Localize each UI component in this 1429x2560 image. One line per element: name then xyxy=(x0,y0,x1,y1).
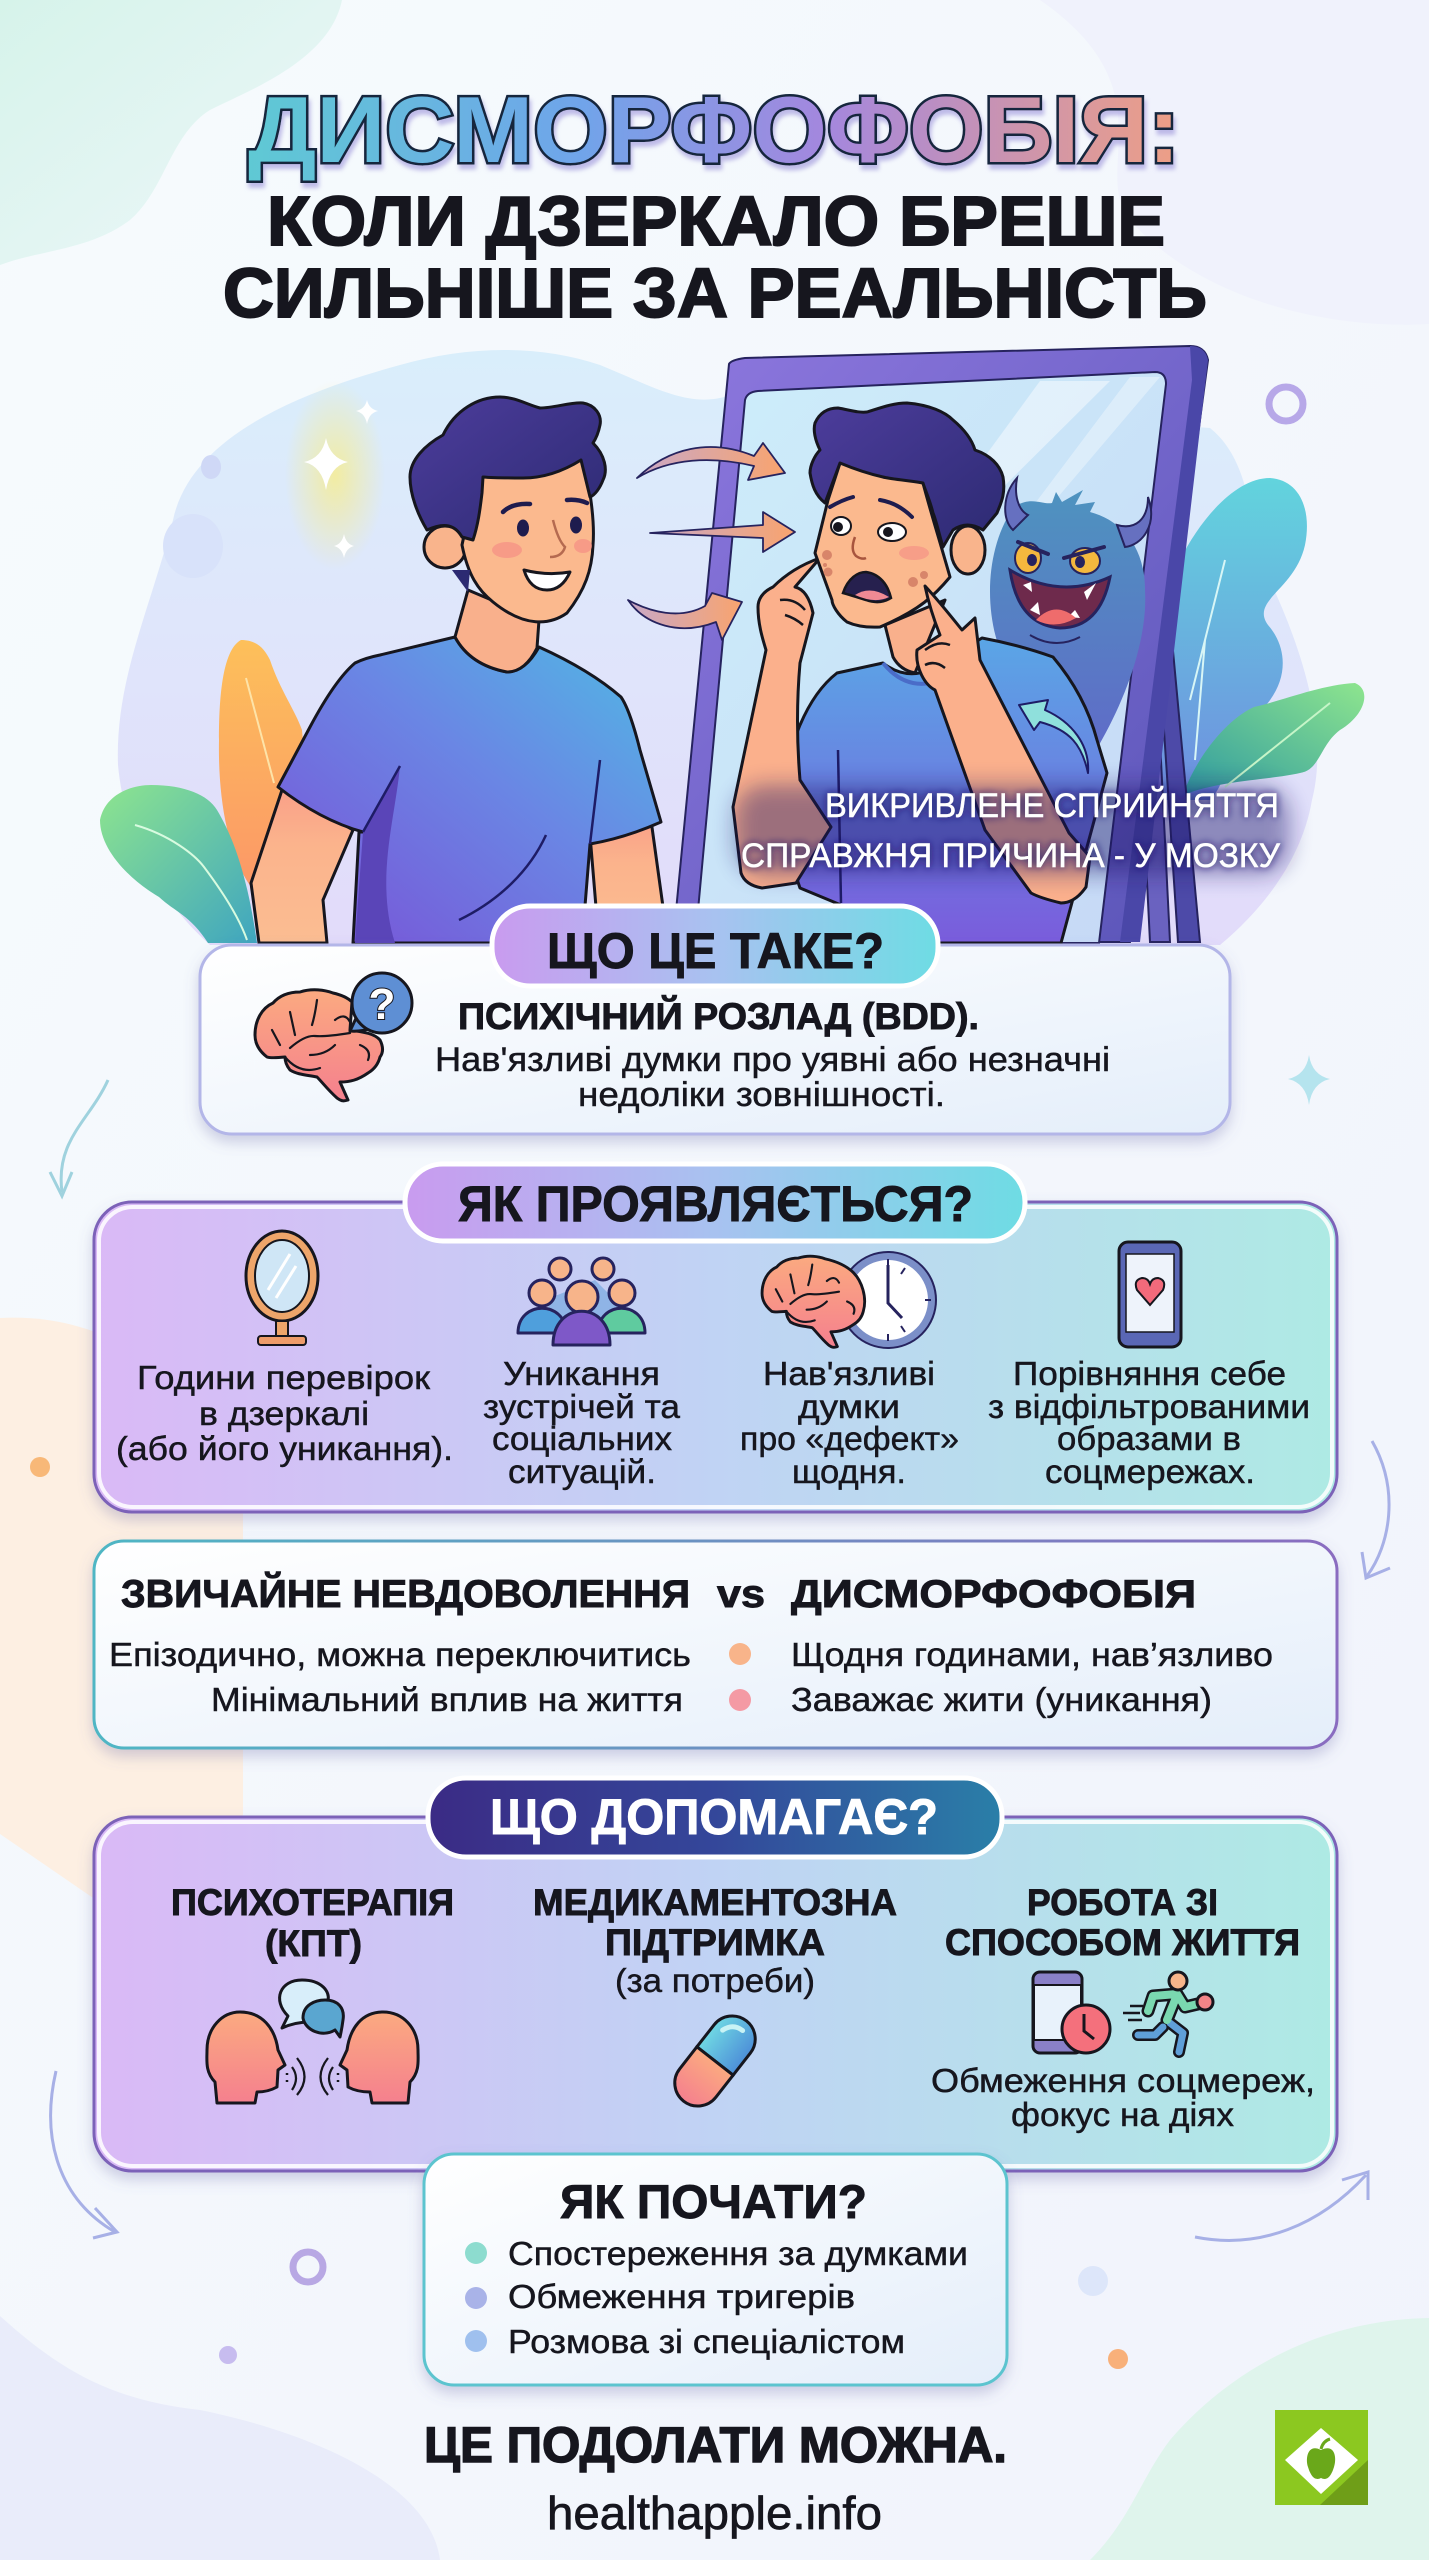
ear and head xyxy=(951,526,985,574)
text: mirror checks: в дзеркалі xyxy=(199,1395,369,1432)
arrows to mirror xyxy=(628,443,795,640)
head xyxy=(424,526,466,568)
text: definition: недоліки зовнішності. xyxy=(578,1076,945,1114)
blue arrow xyxy=(1019,700,1088,773)
heading pill: what helps: ЩО ДОПОМАГАЄ? xyxy=(490,1789,938,1845)
comparison row 1: Епізодично, можна переключитись xyxy=(109,1636,691,1673)
column: psychotherapy: ПСИХОТЕРАПІЯ xyxy=(171,1882,454,1923)
text: comparison: з відфільтрованими xyxy=(988,1388,1310,1425)
comparison row 2 xyxy=(211,1681,1212,1718)
column: lifestyle: Обмеження соцмереж, xyxy=(931,2062,1315,2099)
smiling man xyxy=(251,397,668,943)
icon: brain with question xyxy=(255,973,412,1101)
text: definition: Нав'язливі думки про уявні або незначні xyxy=(435,1041,1110,1079)
icon: runner xyxy=(1123,1972,1213,2052)
title line 3: СИЛЬНІШЕ ЗА РЕАЛЬНІСТЬ xyxy=(223,254,1207,332)
comparison heading xyxy=(121,1571,1196,1616)
panel: symptoms xyxy=(94,1202,1337,1512)
column: psychotherapy xyxy=(171,1882,454,2103)
panel: comparison xyxy=(94,1541,1337,1748)
face details xyxy=(831,517,851,535)
text: definition: ПСИХІЧНИЙ РОЗЛАД (BDD). xyxy=(458,995,979,1037)
hero illustration xyxy=(100,346,1364,945)
panel: how to start xyxy=(424,2154,1007,2385)
heading pill: what helps xyxy=(428,1778,1002,1857)
list item 3: Розмова зі спеціалістом xyxy=(508,2323,905,2360)
text: mirror checks: Години перевірок xyxy=(137,1359,431,1396)
icon: brain with question: ? xyxy=(369,980,395,1029)
icon: phone with heart xyxy=(1119,1242,1181,1347)
website: healthapple.info xyxy=(547,2487,882,2539)
shirt xyxy=(770,638,1107,943)
text: obsessive thoughts: Нав'язливі xyxy=(763,1355,935,1392)
hero backdrop blob xyxy=(118,350,1317,945)
hair xyxy=(810,403,1004,547)
icon: phone and clock xyxy=(1033,1972,1110,2053)
caption: СПРАВЖНЯ ПРИЧИНА - У МОЗКУ xyxy=(741,837,1280,875)
monster xyxy=(990,478,1151,745)
icon: people xyxy=(518,1258,645,1345)
text: avoidance xyxy=(483,1355,681,1490)
neck xyxy=(885,600,945,673)
right hand and arm xyxy=(917,586,1090,903)
decorative arrows and dots xyxy=(30,1055,1390,2369)
text: mirror checks: (або його уникання). xyxy=(116,1430,453,1467)
text: avoidance: зустрічей та xyxy=(483,1388,681,1425)
column: medication xyxy=(533,1882,897,2115)
icon: brain and clock xyxy=(762,1252,936,1348)
comparison heading: vs xyxy=(717,1573,765,1616)
column: lifestyle: фокус на діях xyxy=(1011,2096,1235,2133)
mirror xyxy=(673,346,1208,943)
decorative glow and sparkles xyxy=(163,380,1303,578)
text: avoidance: ситуацій. xyxy=(508,1453,656,1490)
column: lifestyle: СПОСОБОМ ЖИТТЯ xyxy=(945,1922,1300,1963)
column: lifestyle: РОБОТА ЗІ xyxy=(1027,1882,1218,1923)
text: avoidance: Уникання xyxy=(503,1355,660,1392)
comparison heading: ЗВИЧАЙНЕ НЕВДОВОЛЕННЯ xyxy=(121,1571,690,1616)
column: lifestyle xyxy=(931,1882,1315,2133)
neck xyxy=(455,590,539,672)
comparison row 2: Заважає жити (уникання) xyxy=(791,1681,1212,1718)
text: obsessive thoughts: думки xyxy=(798,1388,900,1425)
list item 2: Обмеження тригерів xyxy=(508,2278,855,2315)
closing line: ЦЕ ПОДОЛАТИ МОЖНА. xyxy=(424,2417,1007,2473)
icon: logo xyxy=(1275,2410,1368,2505)
column: medication: МЕДИКАМЕНТОЗНА xyxy=(533,1882,897,1923)
text: obsessive thoughts xyxy=(740,1355,959,1490)
column: medication: ПІДТРИМКА xyxy=(605,1922,825,1963)
panel: what is it xyxy=(200,945,1230,1134)
panel: how to start: ЯК ПОЧАТИ? xyxy=(560,2175,867,2228)
text: comparison: образами в xyxy=(1057,1420,1241,1457)
title xyxy=(223,77,1207,332)
left arm and hand xyxy=(733,558,831,888)
comparison row 1: Щодня годинами, нав’язливо xyxy=(791,1636,1273,1673)
comparison row 2: Мінімальний вплив на життя xyxy=(211,1681,683,1718)
list item 1: Спостереження за думками xyxy=(508,2235,968,2272)
panel: what helps xyxy=(94,1817,1337,2171)
arms xyxy=(251,790,353,943)
text: comparison: Порівняння себе xyxy=(1013,1355,1286,1392)
text: comparison: соцмережах. xyxy=(1045,1453,1255,1490)
heading pill: symptoms: ЯК ПРОЯВЛЯЄТЬСЯ? xyxy=(458,1176,973,1232)
icon: mirror xyxy=(246,1231,318,1345)
text: definition xyxy=(435,995,1110,1114)
icon: capsule xyxy=(665,2007,765,2115)
caption xyxy=(735,785,1290,875)
title line 1: gradient word: ДИСМОРФОФОБІЯ: xyxy=(248,77,1180,182)
column: psychotherapy: (КПТ) xyxy=(265,1923,362,1964)
text: avoidance: соціальних xyxy=(492,1420,673,1457)
shirt xyxy=(278,637,661,943)
heading pill: symptoms xyxy=(405,1164,1025,1241)
plants right xyxy=(1150,478,1364,800)
icon: two heads talking xyxy=(207,1980,418,2103)
comparison row 1 xyxy=(109,1636,1273,1673)
worried reflection xyxy=(733,403,1107,943)
column: medication: (за потреби) xyxy=(615,1962,815,1999)
text: comparison xyxy=(988,1355,1310,1490)
heading pill: what is it xyxy=(492,906,938,986)
text: obsessive thoughts: про «дефект» xyxy=(740,1420,959,1457)
plants left xyxy=(100,640,320,943)
comparison heading: ДИСМОРФОФОБІЯ xyxy=(791,1573,1196,1616)
heading pill: what is it: ЩО ЦЕ ТАКЕ? xyxy=(547,923,884,979)
title line 2: КОЛИ ДЗЕРКАЛО БРЕШЕ xyxy=(267,182,1165,260)
text: mirror checks xyxy=(116,1359,453,1467)
caption: ВИКРИВЛЕНЕ СПРИЙНЯТТЯ xyxy=(825,787,1279,825)
text: obsessive thoughts: щодня. xyxy=(792,1453,906,1490)
